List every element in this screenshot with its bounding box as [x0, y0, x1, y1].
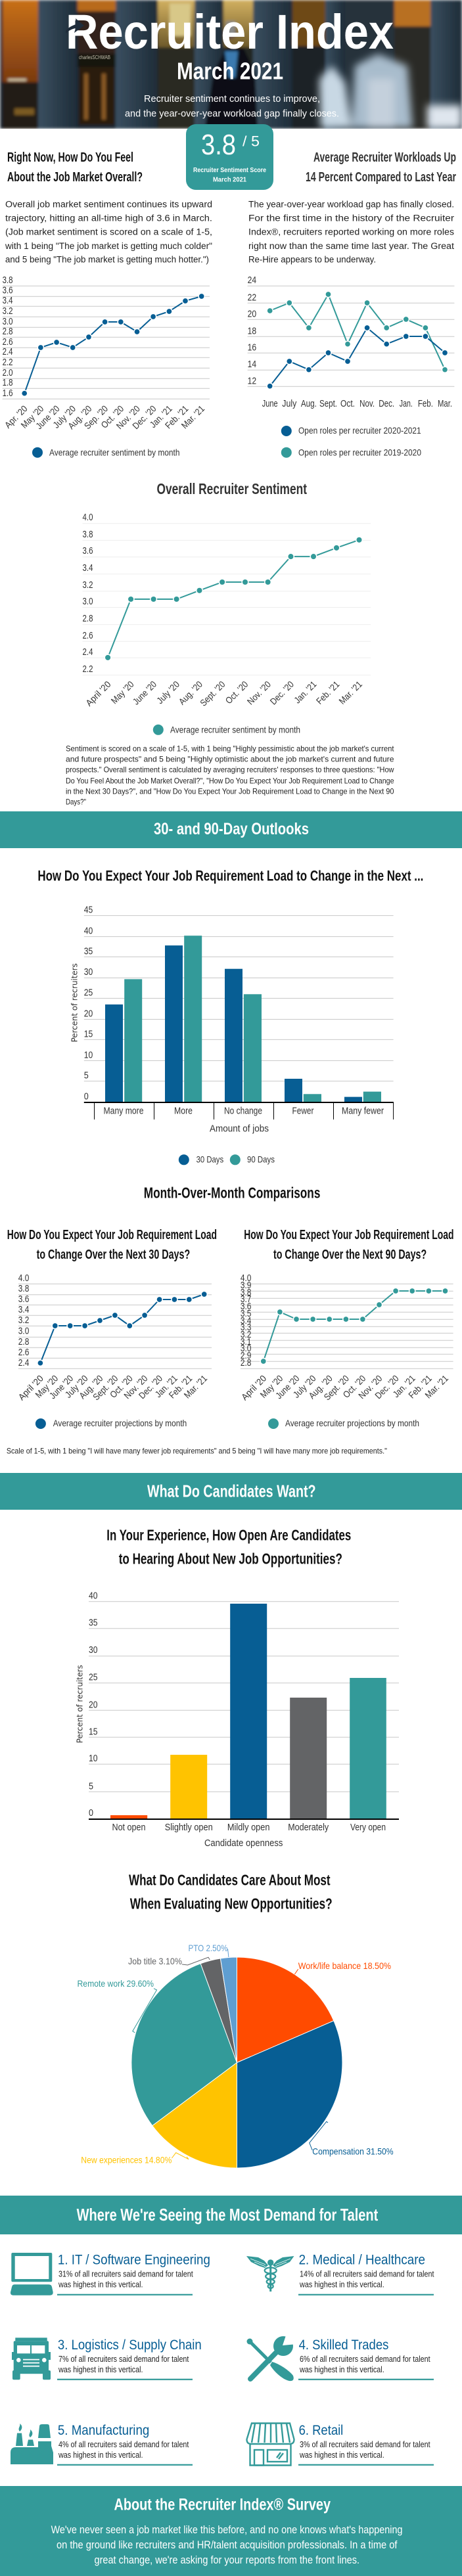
grouped bar chart: 30 and 90 days: 30 [84, 967, 93, 978]
section band: most demand for talent [0, 2196, 462, 2234]
line chart: open roles per recruiter: Mar. [438, 399, 452, 409]
line chart: open roles per recruiter: 20 [248, 309, 256, 319]
heading: next 90 days [244, 1228, 453, 1262]
heading: candidate openness: In Your Experience, How Open Are Candidates [106, 1526, 351, 1543]
pie chart: candidate priorities: Job title 3.10% [128, 1956, 182, 1966]
panel: manufacturing [11, 2423, 193, 2466]
icon: truck [12, 2338, 51, 2380]
bar chart: candidate openness: 30 [89, 1645, 97, 1656]
line chart: overall recruiter sentiment: Sept. '20 [198, 679, 227, 708]
grouped bar chart: 30 and 90 days: 40 [84, 926, 93, 936]
line chart: 30-day projections: 3.2 [18, 1315, 29, 1326]
legend: sentiment by month: Average recruiter sentiment by month [49, 447, 180, 457]
grouped bar chart: 30 and 90 days: 15 [84, 1029, 93, 1039]
line chart: job market sentiment: 2.4 [3, 347, 13, 357]
line chart: open roles per recruiter: 14 [248, 359, 256, 370]
text block: sentiment methodology: prospects." Overall sentiment is calculated by averaging recruiters' responses to three questions: "How [66, 765, 394, 774]
legend: 30 and 90 days: 90 Days [247, 1154, 275, 1164]
grouped bar chart: 30 and 90 days: Amount of jobs [210, 1124, 269, 1135]
line chart: overall recruiter sentiment: 2.6 [83, 631, 93, 641]
line chart: job market sentiment: 1.6 [3, 388, 13, 399]
panel: logistics / supply chain: 3. Logistics / Supply Chain [58, 2338, 202, 2353]
heading: overall recruiter sentiment: Overall Recruiter Sentiment [156, 480, 307, 497]
line chart: job market sentiment: 1.8 [3, 378, 13, 388]
line chart: 30-day projections: 4.0 [18, 1273, 29, 1284]
line chart: 90-day projections: 3.6 [241, 1301, 251, 1312]
line chart: 30-day projections: Sept. '20 [91, 1373, 120, 1402]
panel: IT / software engineering: 31% of all recruiters said demand for talent [58, 2269, 193, 2279]
legend: 30-day projections: Average recruiter projections by month [53, 1418, 187, 1428]
line chart: 90-day projections: Dec. '20 [373, 1373, 401, 1401]
line chart: 30-day projections [16, 1273, 212, 1429]
line chart: job market sentiment: 2.2 [3, 357, 13, 368]
line chart: overall recruiter sentiment: April '20 [83, 679, 113, 708]
line chart: 30-day projections: April '20 [16, 1373, 45, 1402]
line chart: 30-day projections: Oct. '20 [108, 1373, 135, 1400]
panel: retail: 6. Retail [299, 2423, 343, 2438]
body text: workloads: right now than the same time last year. The Great [248, 241, 454, 251]
pie chart: candidate priorities: New experiences 14.80% [81, 2155, 172, 2165]
grouped bar chart: 30 and 90 days [70, 905, 394, 1165]
section band: what do candidates want: What Do Candidates Want? [147, 1481, 316, 1501]
line chart: job market sentiment: Oct. '20 [99, 403, 126, 430]
grouped bar chart: 30 and 90 days: 35 [84, 946, 93, 957]
line chart: 30-day projections: Aug. '20 [77, 1373, 105, 1401]
line chart: job market sentiment: Mar. '21 [179, 403, 206, 431]
panel: skilled trades: was highest in this vertical. [299, 2364, 384, 2374]
heading: what candidates care about [129, 1871, 333, 1912]
line chart: 30-day projections: 2.4 [18, 1358, 29, 1368]
icon: tools [247, 2336, 295, 2381]
line chart: overall recruiter sentiment [83, 512, 371, 735]
body text: job market: and 5 being "The job market is getting much hotter.") [5, 255, 209, 265]
line chart: 90-day projections: April '20 [239, 1373, 268, 1402]
panel: logistics / supply chain: 7% of all recruiters said demand for talent [58, 2354, 189, 2364]
line chart: 30-day projections: Dec. '20 [137, 1373, 164, 1401]
text block: sentiment methodology: Sentiment is scored on a scale of 1-5, with 1 being "Highly pessimistic about the job market's current [66, 744, 394, 753]
line chart: open roles per recruiter: 12 [248, 376, 256, 386]
bar chart: candidate openness: Mildly open [227, 1822, 270, 1833]
icon: arrow in logo [66, 18, 84, 34]
footer panel: about the survey: great change, we're asking for your reports from the front lines. [95, 2554, 359, 2566]
legend: 90-day projections: Average recruiter projections by month [285, 1418, 419, 1428]
section band: 30- and 90-day outlooks [0, 811, 462, 848]
line chart: overall recruiter sentiment: Mar. '21 [336, 679, 364, 706]
line chart: 30-day projections: 2.6 [18, 1347, 29, 1358]
grouped bar chart: 30 and 90 days: Fewer [292, 1106, 314, 1117]
heading: job market: About the Job Market Overall? [7, 170, 143, 185]
heading: candidate openness: to Hearing About New Job Opportunities? [119, 1550, 342, 1567]
panel: manufacturing: 4% of all recruiters said demand for talent [58, 2439, 189, 2449]
line chart: overall recruiter sentiment: Dec. '20 [268, 679, 296, 707]
panel: logistics / supply chain: was highest in this vertical. [58, 2364, 143, 2374]
panel: medical / healthcare: 2. Medical / Healthcare [299, 2253, 425, 2268]
line chart: overall recruiter sentiment: 2.8 [83, 614, 93, 624]
line chart: overall recruiter sentiment: Aug. '20 [177, 679, 204, 707]
grouped bar chart: 30 and 90 days: 0 [84, 1092, 89, 1102]
bar chart: candidate openness: Not open [112, 1822, 146, 1833]
panel: retail: was highest in this vertical. [299, 2450, 384, 2460]
line chart: job market sentiment [3, 275, 210, 458]
text block: sentiment methodology: in the Next 30 Days?", and "How Do You Expect Your Job Requirement Load to Change in the Next 90 [66, 787, 394, 796]
bar chart: candidate openness: 0 [89, 1808, 93, 1819]
legend: open roles: Open roles per recruiter 2020-2021 [298, 425, 421, 436]
line chart: overall recruiter sentiment: 3.4 [83, 563, 93, 574]
line chart: open roles per recruiter: Feb. [418, 399, 433, 409]
bar chart: candidate openness [75, 1591, 399, 1849]
line chart: overall recruiter sentiment: 3.2 [83, 580, 93, 591]
line chart: open roles per recruiter: Jan. [400, 399, 413, 409]
line chart: overall recruiter sentiment: Nov. '20 [245, 679, 273, 707]
heading: candidate openness [106, 1526, 351, 1567]
bar chart: candidate openness: 35 [89, 1617, 97, 1628]
line chart: 90-day projections: Mar. '21 [423, 1373, 450, 1401]
grouped bar chart: 30 and 90 days: Many more [104, 1106, 143, 1117]
footer panel: about the survey: We've never seen a job market like this before, and no one knows what's happening [51, 2523, 403, 2536]
body text: workloads: Index®, recruiters reported working on more roles [248, 227, 454, 237]
line chart: open roles per recruiter: 24 [248, 275, 256, 286]
heading: job market [7, 150, 143, 185]
text block: sentiment methodology: and future prospects" and 5 being "Highly optimistic about the job market's current and future [66, 754, 394, 763]
bar chart: candidate openness: 5 [89, 1781, 93, 1792]
line chart: 30-day projections: 3.6 [18, 1294, 29, 1305]
icon: storefront [247, 2423, 294, 2465]
line chart: 30-day projections: Feb. '21 [167, 1373, 194, 1401]
line chart: 90-day projections: 3.4 [241, 1316, 251, 1326]
legend: overall sentiment: Average recruiter sentiment by month [170, 724, 300, 734]
panel: medical / healthcare [246, 2253, 434, 2295]
panel: logistics / supply chain [12, 2338, 202, 2380]
hero tagline [125, 93, 339, 120]
text block: sentiment methodology: Days?" [66, 797, 86, 806]
line chart: open roles per recruiter: 22 [248, 292, 256, 303]
line chart: 90-day projections: Aug. '20 [306, 1373, 335, 1401]
grouped bar chart: 30 and 90 days: 45 [84, 905, 93, 915]
pie chart: candidate priorities: PTO 2.50% [188, 1943, 227, 1953]
pie chart: candidate priorities [78, 1943, 394, 2168]
line chart: 90-day projections: Feb. '21 [406, 1373, 434, 1401]
bar chart: candidate openness: 10 [89, 1753, 97, 1764]
line chart: open roles per recruiter: June [262, 399, 278, 409]
line chart: 90-day projections: Jan. '21 [390, 1373, 417, 1399]
line chart: overall recruiter sentiment: Oct. '20 [223, 679, 250, 706]
bar chart: candidate openness: Percent of recruiters [75, 1665, 84, 1743]
score badge: March 2021 [213, 176, 246, 184]
panel: skilled trades: 6% of all recruiters said demand for talent [300, 2354, 430, 2364]
icon: factory [11, 2424, 53, 2464]
line chart: overall recruiter sentiment: 2.2 [83, 664, 93, 675]
line chart: open roles per recruiter: Oct. [340, 399, 355, 409]
line chart: 30-day projections: May '20 [33, 1373, 60, 1400]
panel: IT / software engineering: 1. IT / Software Engineering [58, 2253, 210, 2268]
heading: what candidates care about: What Do Candidates Care About Most [129, 1871, 331, 1888]
line chart: 90-day projections: 3.8 [241, 1288, 251, 1298]
line chart: 90-day projections: 3.5 [241, 1309, 251, 1319]
legend: 30 and 90 days: 30 Days [196, 1154, 223, 1164]
panel: IT / software engineering [11, 2253, 210, 2295]
line chart: 30-day projections: Nov. '20 [122, 1373, 150, 1401]
line chart: job market sentiment: Apr. '20 [3, 403, 30, 430]
line chart: overall recruiter sentiment: May '20 [109, 679, 136, 706]
subtitle: March 2021: March 2021 [177, 58, 283, 85]
line chart: 30-day projections: June '20 [47, 1373, 75, 1401]
panel: IT / software engineering: was highest in this vertical. [58, 2280, 143, 2290]
icon: computer [11, 2253, 53, 2295]
heading: what candidates care about: When Evaluating New Opportunities? [130, 1895, 333, 1912]
line chart: 90-day projections: 3.7 [241, 1294, 251, 1305]
line chart: 90-day projections: June '20 [273, 1373, 302, 1401]
line chart: open roles per recruiter: 18 [248, 326, 256, 336]
line chart: job market sentiment: 2.6 [3, 337, 13, 348]
body text: workloads [248, 200, 455, 265]
body text: workloads: For the first time in the history of the Recruiter [248, 214, 455, 223]
body text: workloads: The year-over-year workload gap has finally closed. [248, 200, 454, 210]
footer panel: about the survey: on the ground like recruiters and HR/talent acquisition professionals. In a time of [57, 2539, 398, 2551]
line chart: job market sentiment: Sep. '20 [82, 403, 110, 431]
body text: job market [5, 200, 212, 265]
panel: manufacturing: was highest in this vertical. [58, 2450, 143, 2460]
grouped bar chart: 30 and 90 days: 20 [84, 1009, 93, 1020]
line chart: 30-day projections: Jan. '21 [153, 1373, 179, 1399]
line chart: 90-day projections: 2.9 [241, 1351, 251, 1361]
heading: month-over-month comparisons: Month-Over-Month Comparisons [144, 1184, 320, 1201]
line chart: 90-day projections: 3.1 [241, 1337, 251, 1347]
heading: next 30 days: How Do You Expect Your Job Requirement Load [7, 1228, 217, 1242]
line chart: overall recruiter sentiment: 4.0 [83, 512, 93, 523]
section band: most demand for talent: Where We're Seeing the Most Demand for Talent [77, 2205, 379, 2225]
footnote: projections scale: Scale of 1-5, with 1 being "I will have many fewer job requirements" and 5 being "I will have many more job requirements." [7, 1447, 387, 1456]
title: Recruiter Index: Recruiter Index [66, 5, 394, 59]
pie chart: candidate priorities: Compensation 31.50% [312, 2146, 394, 2156]
panel: skilled trades: 4. Skilled Trades [299, 2338, 388, 2353]
line chart: overall recruiter sentiment: Feb. '21 [314, 679, 342, 706]
legend: open roles: Open roles per recruiter 2019-2020 [298, 447, 421, 457]
line chart: overall recruiter sentiment: 3.0 [83, 597, 93, 607]
bar chart: candidate openness: Slightly open [165, 1822, 213, 1833]
line chart: 30-day projections: July '20 [63, 1373, 90, 1400]
panel: skilled trades [247, 2336, 434, 2381]
bar chart: candidate openness: 40 [89, 1591, 97, 1601]
line chart: job market sentiment: Jan. '21 [148, 403, 174, 430]
line chart: 90-day projections: May '20 [258, 1373, 285, 1400]
line chart: open roles per recruiter: 16 [248, 342, 256, 353]
footer panel: about the survey [0, 2486, 462, 2576]
bar chart: candidate openness: 25 [89, 1672, 97, 1683]
heading: workloads [306, 150, 456, 185]
line chart: job market sentiment: 3.0 [3, 317, 13, 327]
line chart: job market sentiment: 3.6 [3, 286, 13, 296]
line chart: overall recruiter sentiment: Jan. '21 [292, 679, 319, 706]
line chart: 90-day projections: 2.8 [241, 1358, 251, 1368]
line chart: 30-day projections: 2.8 [18, 1337, 29, 1347]
line chart: job market sentiment: July '20 [51, 403, 78, 430]
grouped bar chart: 30 and 90 days: No change [224, 1106, 262, 1117]
pie chart: candidate priorities: Work/life balance 18.50% [298, 1960, 391, 1971]
legend: 30 and 90 days [179, 1154, 275, 1165]
panel: retail [247, 2423, 434, 2466]
line chart: overall recruiter sentiment: July '20 [154, 679, 181, 706]
footer panel: about the survey: About the Recruiter Index® Survey [114, 2496, 331, 2514]
section band: what do candidates want [0, 1473, 462, 1510]
panel: medical / healthcare: was highest in this vertical. [299, 2280, 384, 2290]
line chart: 90-day projections: Oct. '20 [340, 1373, 368, 1400]
panel: manufacturing: 5. Manufacturing [58, 2423, 149, 2438]
line chart: open roles per recruiter: Aug. [301, 399, 317, 409]
score badge: 3.8 [201, 129, 236, 161]
score badge: Recruiter Sentiment Score [193, 166, 266, 174]
text block: sentiment methodology: Do You Feel About the Job Market Overall?", "How Do You Expect Your Job Requirement Load to Change [66, 776, 394, 785]
pie chart: candidate priorities: Remote work 29.60% [78, 1978, 154, 1989]
grouped bar chart: 30 and 90 days: More [174, 1106, 193, 1117]
panel: retail: 3% of all recruiters said demand for talent [300, 2439, 430, 2449]
line chart: open roles per recruiter: Dec. [379, 399, 394, 409]
line chart: 90-day projections: 4.0 [241, 1273, 251, 1284]
grouped bar chart: 30 and 90 days: Many fewer [342, 1106, 384, 1117]
heading: next 30 days [7, 1228, 217, 1262]
hero tagline: Recruiter sentiment continues to improve, [144, 93, 320, 104]
hero banner: street photo: charlesSCHWAB [79, 55, 110, 60]
line chart: overall recruiter sentiment: 2.4 [83, 647, 93, 658]
line chart: 90-day projections: Nov. '20 [356, 1373, 384, 1401]
heading: next 30 days: to Change Over the Next 30 Days? [37, 1248, 190, 1262]
line chart: open roles per recruiter: Nov. [359, 399, 375, 409]
hero tagline: and the year-over-year workload gap finally closes. [125, 108, 339, 120]
line chart: job market sentiment: Aug. '20 [66, 403, 94, 431]
grouped bar chart: 30 and 90 days: Percent of recruiters [70, 963, 79, 1042]
line chart: 30-day projections: 3.0 [18, 1326, 29, 1337]
icon: caduceus [246, 2256, 294, 2292]
line chart: 30-day projections: 3.8 [18, 1284, 29, 1294]
line chart: job market sentiment: June '20 [34, 403, 62, 431]
line chart: job market sentiment: 3.2 [3, 306, 13, 317]
legend: open roles [281, 425, 421, 458]
grouped bar chart: 30 and 90 days: 5 [84, 1071, 89, 1081]
body text: workloads: Re-Hire appears to be underway. [248, 255, 376, 265]
line chart: 90-day projections [239, 1273, 453, 1429]
body text: job market: (Job market sentiment is scored on a scale of 1-5, [5, 227, 212, 237]
line chart: open roles per recruiter: Sept. [319, 399, 337, 409]
line chart: open roles per recruiter: July [282, 399, 297, 409]
line chart: open roles per recruiter [248, 275, 454, 458]
line chart: 90-day projections: Sept. '20 [321, 1373, 351, 1402]
bar chart: candidate openness: 20 [89, 1700, 97, 1710]
hero banner: street photo [0, 0, 462, 129]
line chart: job market sentiment: 2.8 [3, 327, 13, 337]
line chart: overall recruiter sentiment: June '20 [131, 679, 158, 707]
line chart: 90-day projections: 3.9 [241, 1280, 251, 1291]
heading: job market: Right Now, How Do You Feel [7, 150, 133, 165]
bar chart: candidate openness: Candidate openness [204, 1838, 283, 1849]
line chart: job market sentiment: Nov. '20 [114, 403, 142, 431]
body text: job market: trajectory, hitting an all-time high of 3.6 in March. [5, 214, 212, 223]
grouped bar chart: 30 and 90 days: 10 [84, 1050, 93, 1060]
line chart: job market sentiment: 3.4 [3, 296, 13, 306]
line chart: 30-day projections: Mar. '21 [182, 1373, 209, 1401]
grouped bar chart: 30 and 90 days: 25 [84, 988, 93, 999]
score badge: / 5 [243, 133, 260, 150]
line chart: job market sentiment: Feb. '21 [163, 403, 191, 431]
line chart: 90-day projections: July '20 [291, 1373, 318, 1400]
bar chart: candidate openness: 15 [89, 1727, 97, 1737]
panel: medical / healthcare: 14% of all recruiters said demand for talent [300, 2269, 434, 2279]
section band: 30- and 90-day outlooks: 30- and 90-Day Outlooks [154, 820, 309, 838]
score badge [186, 124, 273, 190]
body text: job market: Overall job market sentiment continues its upward [5, 200, 212, 210]
text block: sentiment methodology [66, 744, 394, 806]
line chart: job market sentiment: 2.0 [3, 368, 13, 378]
line chart: job market sentiment: 3.8 [3, 275, 13, 286]
line chart: job market sentiment: Dec. '20 [130, 403, 158, 431]
line chart: 90-day projections: 3.2 [241, 1330, 251, 1340]
bar chart: candidate openness: Very open [350, 1822, 386, 1833]
line chart: 30-day projections: 3.4 [18, 1305, 29, 1315]
line chart: overall recruiter sentiment: 3.6 [83, 546, 93, 556]
body text: job market: with 1 being "The job market is getting much colder" [5, 241, 212, 251]
line chart: 90-day projections: 3.3 [241, 1322, 251, 1333]
line chart: overall recruiter sentiment: 3.8 [83, 530, 93, 540]
bar chart: candidate openness: Moderately [288, 1822, 329, 1833]
line chart: 90-day projections: 3.0 [241, 1344, 251, 1354]
line chart: job market sentiment: May '20 [18, 403, 46, 430]
